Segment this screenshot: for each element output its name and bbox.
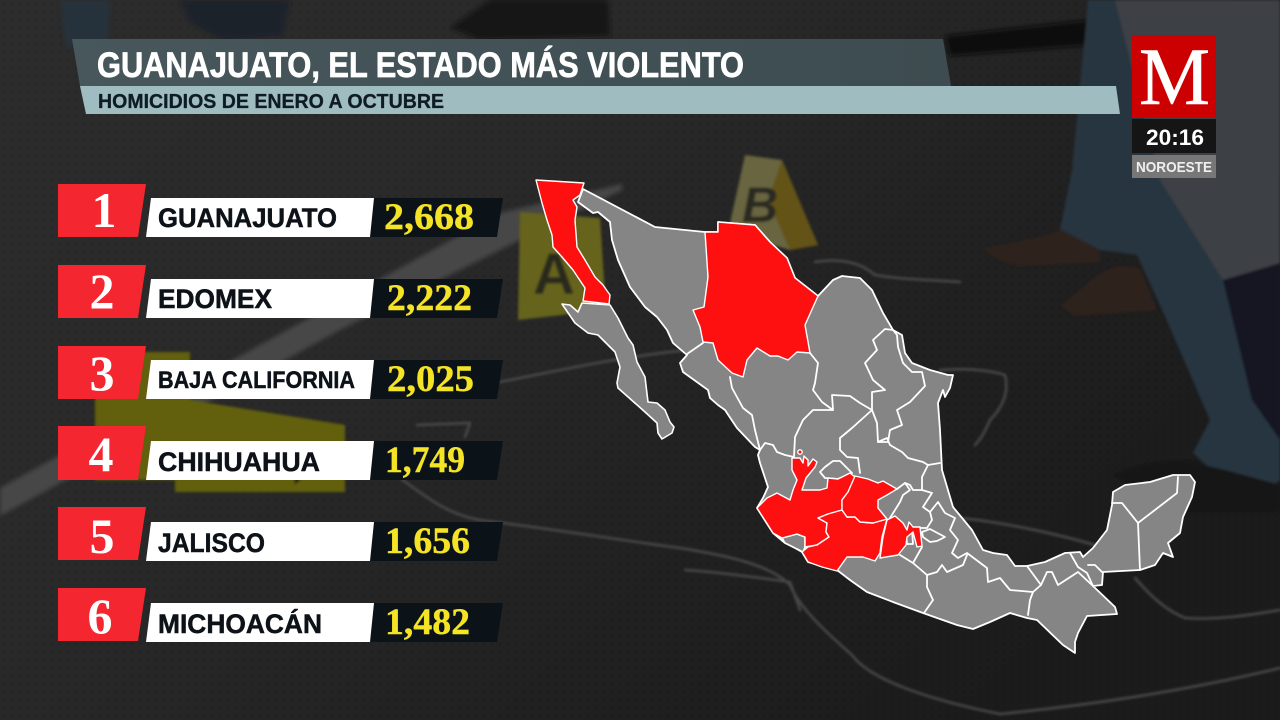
map of Mexico	[536, 180, 1195, 653]
row 5: Jalisco: 1,656	[385, 521, 470, 562]
row 6: Michoacán: 1,482	[385, 602, 470, 643]
evidence marker B	[728, 155, 818, 250]
row 4: Chihuahua: 1,749	[385, 440, 465, 481]
state: Estado de México (red)	[880, 516, 922, 558]
row 3: Baja California: 2,025	[387, 359, 474, 400]
header: subtitle bar	[80, 86, 1120, 114]
row 6: Michoacán: MICHOACÁN	[158, 608, 322, 639]
row 5: Jalisco: 5	[90, 508, 114, 564]
row 2: Edomex: 2	[90, 263, 114, 319]
row 2: Edomex: EDOMEX	[158, 284, 272, 314]
Colima	[782, 534, 805, 552]
state: Jalisco (red)	[757, 450, 855, 547]
row 2: Edomex	[58, 263, 503, 319]
chalk outline	[400, 261, 1280, 714]
region label: NOROESTE	[1136, 159, 1212, 176]
row 3: Baja California: 3	[90, 345, 114, 401]
row 6: Michoacán: 6	[88, 588, 112, 644]
header: subtitle bar: HOMICIDIOS DE ENERO A OCTUBRE	[98, 91, 444, 113]
row 3: Baja California: BAJA CALIFORNIA	[158, 367, 355, 394]
state: Baja California (red)	[536, 180, 610, 304]
evidence marker B: B	[742, 177, 778, 233]
row 4: Chihuahua: 4	[88, 426, 114, 482]
row 1: Guanajuato: GUANAJUATO	[158, 203, 337, 233]
row 1: Guanajuato: 1	[92, 182, 116, 238]
state: Michoacán (red)	[802, 510, 887, 571]
state: Guanajuato (red)	[842, 476, 897, 523]
top legs	[60, 0, 1090, 56]
row 5: Jalisco: JALISCO	[158, 528, 265, 558]
evidence marker bottom left	[95, 352, 345, 492]
mainland silhouette	[578, 189, 1195, 653]
row 4: Chihuahua	[58, 426, 503, 482]
row 1: Guanajuato	[58, 182, 503, 238]
header: title bar	[72, 39, 951, 86]
logo: Milenio M: M	[1139, 31, 1210, 122]
state borders	[687, 329, 1178, 615]
row 2: Edomex: 2,222	[387, 278, 472, 319]
clock	[1132, 119, 1216, 153]
evidence marker A	[518, 212, 606, 320]
road stripe	[0, 184, 622, 516]
state: Chihuahua (red)	[693, 222, 818, 377]
header: title bar: GUANAJUATO, EL ESTADO MÁS VIOLENTO	[97, 45, 744, 85]
clock: 20:16	[1146, 125, 1204, 150]
person on the right: jeans, shirt and boots	[983, 0, 1280, 512]
row 6: Michoacán	[58, 588, 503, 644]
row 3: Baja California	[58, 345, 503, 401]
Baja California Sur	[562, 303, 674, 439]
ranking list	[58, 182, 503, 644]
region label	[1132, 155, 1216, 178]
evidence marker A: A	[533, 242, 575, 307]
row 5: Jalisco	[58, 507, 503, 564]
row 4: Chihuahua: CHIHUAHUA	[158, 447, 320, 477]
row 1: Guanajuato: 2,668	[384, 197, 474, 238]
